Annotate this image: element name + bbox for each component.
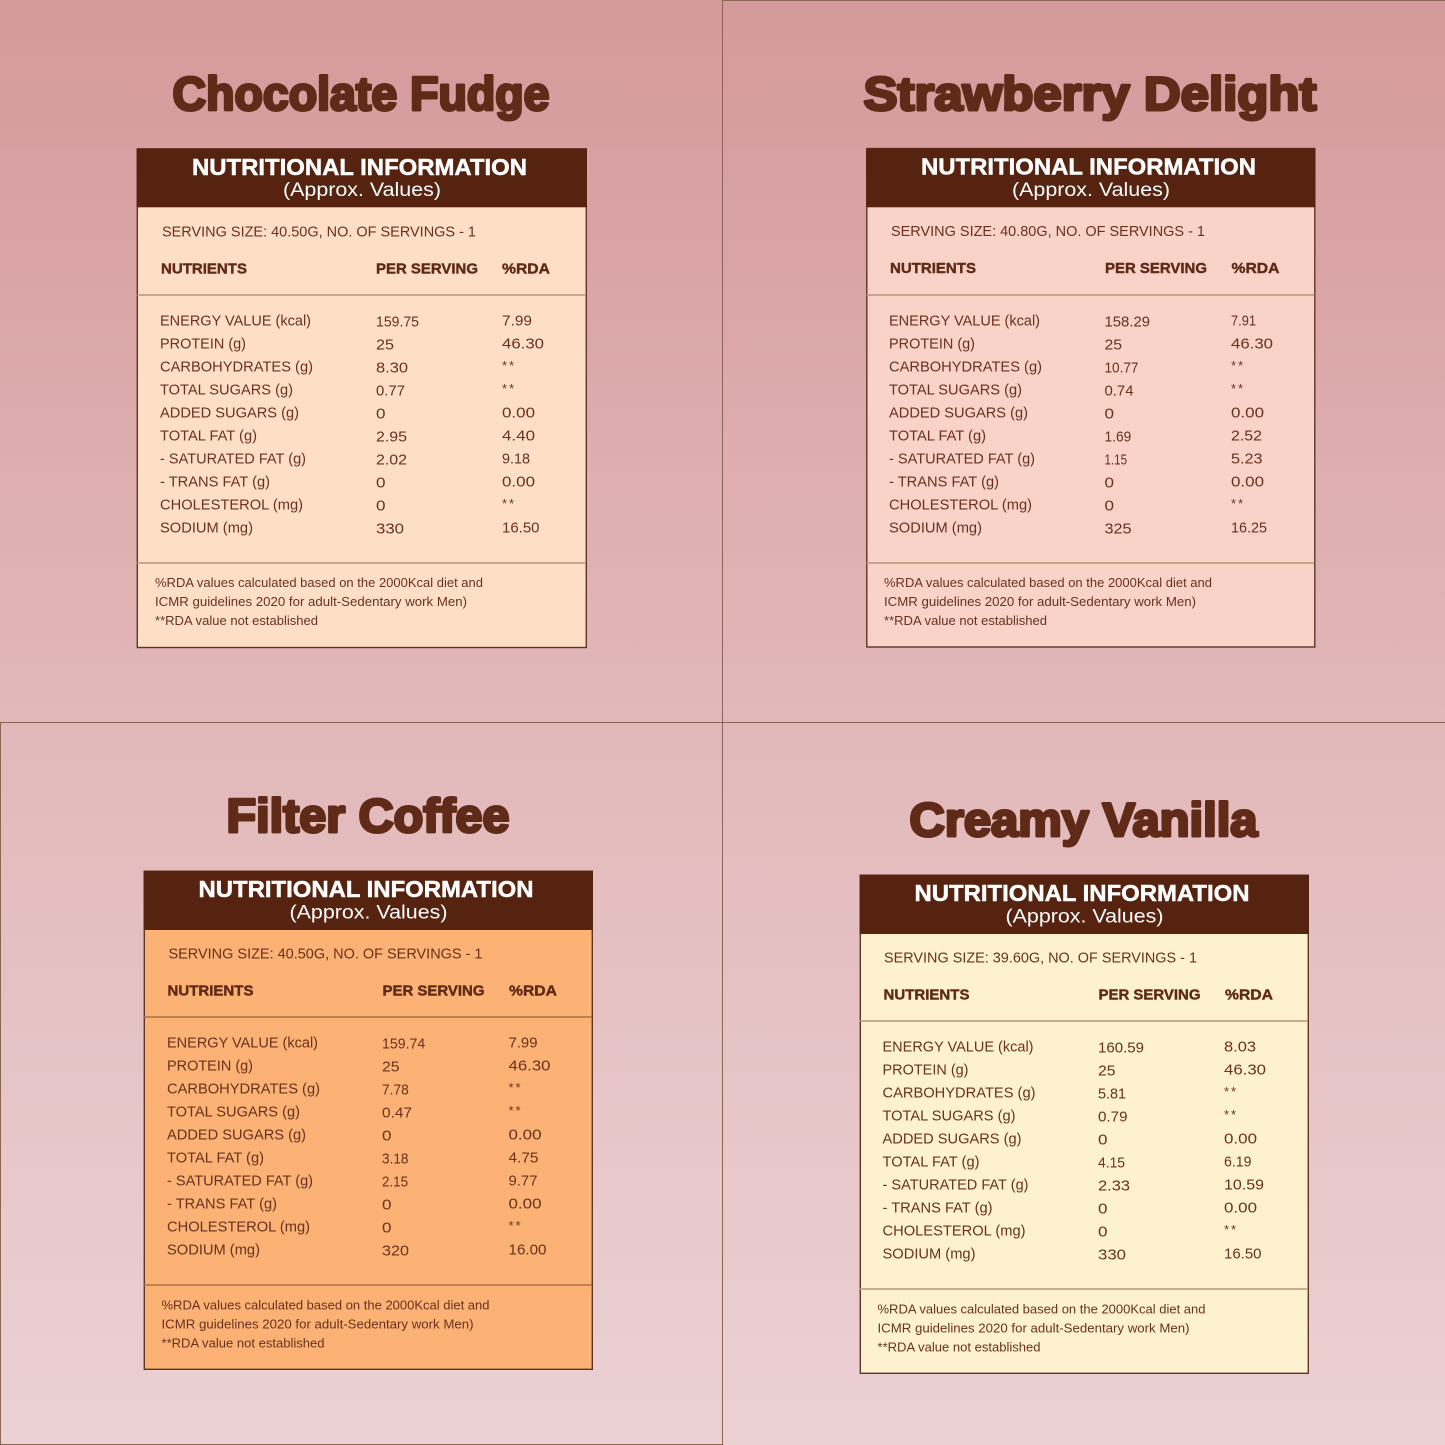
nutrient table: 16.25 (1231, 520, 1267, 536)
column headings: NUTRIENTS (884, 988, 970, 1004)
nutrient table: ADDED SUGARS (g) (889, 406, 1028, 422)
nutrient table: 1.15 (1104, 452, 1127, 468)
nutrient table: PROTEIN (g) (167, 1058, 253, 1074)
footnote (878, 1302, 1206, 1354)
nutrient table: 0.00 (502, 404, 535, 422)
nutrient table: 160.59 (1098, 1040, 1144, 1056)
nutrient table: ** (502, 358, 514, 373)
nutrient table: 46.30 (508, 1058, 550, 1074)
footnote (155, 575, 483, 628)
nutrient table: CARBOHYDRATES (g) (167, 1082, 320, 1098)
header band: NUTRITIONAL INFORMATION (192, 154, 527, 180)
nutrient table: PROTEIN (g) (160, 336, 246, 352)
nutrient table: 0.00 (508, 1196, 542, 1212)
nutrient table: ADDED SUGARS (g) (882, 1132, 1022, 1148)
nutrient table: TOTAL FAT (g) (167, 1150, 264, 1166)
nutrient table: PROTEIN (g) (889, 336, 975, 352)
column headings: PER SERVING (376, 262, 478, 278)
footnote: **RDA value not established (162, 1336, 324, 1350)
footnote: ICMR guidelines 2020 for adult-Sedentary work Men) (162, 1316, 474, 1332)
footnote: %RDA values calculated based on the 2000Kcal diet and (878, 1302, 1206, 1316)
nutrient table: ENERGY VALUE (kcal) (160, 314, 311, 330)
footnote: ICMR guidelines 2020 for adult-Sedentary work Men) (884, 594, 1196, 609)
nutrient table: 0 (1098, 1132, 1108, 1148)
nutrient table: 158.29 (1104, 314, 1150, 330)
header band: (Approx. Values) (1012, 180, 1170, 201)
footnote: **RDA value not established (878, 1340, 1040, 1354)
nutrient table: SODIUM (mg) (889, 520, 982, 536)
nutrient table: 330 (1098, 1246, 1126, 1264)
nutrient table: ENERGY VALUE (kcal) (167, 1036, 318, 1052)
column headings (890, 261, 1280, 277)
column headings: %RDA (1232, 261, 1280, 277)
nutrient table: 16.50 (502, 520, 540, 536)
nutrient table: 9.77 (508, 1172, 538, 1190)
nutrient table: 0.00 (508, 1126, 542, 1144)
nutrient table: 0 (1104, 498, 1114, 514)
serving size: SERVING SIZE: 39.60G, NO. OF SERVINGS - 1 (884, 950, 1197, 966)
footnote (162, 1298, 490, 1350)
nutrient table: 0 (376, 498, 386, 514)
nutrient table: TOTAL SUGARS (g) (882, 1108, 1016, 1124)
column headings: PER SERVING (1098, 988, 1200, 1004)
header band: NUTRITIONAL INFORMATION (914, 880, 1250, 906)
nutrient table: - SATURATED FAT (g) (882, 1178, 1028, 1194)
nutrient table: 0.00 (502, 474, 535, 490)
footnote: ICMR guidelines 2020 for adult-Sedentary work Men) (878, 1320, 1190, 1336)
footnote (884, 575, 1212, 628)
header band: (Approx. Values) (1006, 906, 1164, 928)
nutrient table: - SATURATED FAT (g) (889, 452, 1035, 468)
nutrient table: 0 (1104, 474, 1114, 492)
nutrient table: CARBOHYDRATES (g) (160, 360, 313, 376)
nutrient table: 320 (382, 1242, 409, 1260)
nutrient table: 25 (1104, 336, 1122, 354)
nutrient table: - SATURATED FAT (g) (160, 452, 306, 468)
nutrient table: 46.30 (1224, 1062, 1266, 1078)
nutrient table: SODIUM (mg) (160, 520, 253, 536)
footnote: **RDA value not established (884, 613, 1047, 628)
nutrient table: 2.95 (376, 428, 407, 446)
nutrient table: 46.30 (1231, 336, 1273, 352)
column headings: NUTRIENTS (161, 262, 247, 278)
nutrient table: TOTAL SUGARS (g) (167, 1104, 300, 1120)
nutrient table: 2.52 (1231, 428, 1262, 444)
nutrient table: 2.33 (1098, 1178, 1130, 1194)
title: Filter Coffee: Filter Coffee (226, 790, 510, 843)
column headings: PER SERVING (382, 984, 484, 1000)
column headings (884, 988, 1274, 1004)
column headings: %RDA (509, 984, 558, 1000)
nutrient table: 4.40 (502, 428, 535, 444)
nutrient table: 10.77 (1104, 360, 1138, 376)
footnote: %RDA values calculated based on the 2000Kcal diet and (162, 1298, 490, 1312)
nutrient table: 0.79 (1098, 1108, 1128, 1126)
nutrient table (882, 1038, 1266, 1264)
nutrient table: 7.99 (502, 312, 532, 330)
nutrient table: 16.00 (508, 1242, 546, 1258)
nutrient table: ADDED SUGARS (g) (167, 1128, 306, 1144)
nutrient table: CHOLESTEROL (mg) (882, 1224, 1026, 1240)
nutrient table: 3.18 (382, 1150, 408, 1168)
nutrient table: 7.78 (382, 1082, 409, 1098)
panel: Strawberry Delight nutrition card (866, 148, 1316, 647)
nutrient table: CHOLESTEROL (mg) (160, 498, 303, 514)
serving size: SERVING SIZE: 40.50G, NO. OF SERVINGS - 1 (162, 224, 476, 240)
header band (144, 871, 593, 930)
header band: NUTRITIONAL INFORMATION (921, 154, 1256, 180)
nutrient table: ** (502, 381, 514, 396)
nutrient table: ** (508, 1218, 520, 1233)
panel: Filter Coffee nutrition card (144, 871, 593, 1369)
nutrient table: 0.74 (1104, 382, 1134, 400)
nutrient table: 0.00 (1231, 474, 1264, 490)
header band: NUTRITIONAL INFORMATION (198, 876, 534, 902)
panel: Creamy Vanilla nutrition card (860, 875, 1309, 1373)
panel: Chocolate Fudge nutrition card (137, 148, 587, 648)
nutrient table: 8.03 (1224, 1038, 1256, 1056)
nutrient table: 0 (1098, 1200, 1108, 1218)
nutrient table: ** (1224, 1222, 1236, 1237)
nutrient table: CARBOHYDRATES (g) (889, 360, 1042, 376)
nutrient table: - TRANS FAT (g) (160, 474, 270, 490)
nutrient table: - TRANS FAT (g) (167, 1196, 277, 1212)
header band (860, 875, 1309, 934)
nutrient table (167, 1034, 550, 1260)
nutrient table: TOTAL FAT (g) (160, 428, 257, 444)
nutrient table: ** (1231, 496, 1243, 511)
nutrient table: 6.19 (1224, 1154, 1252, 1170)
nutrient table: TOTAL SUGARS (g) (160, 382, 293, 398)
nutrient table: 8.30 (376, 360, 408, 376)
nutrient table: ** (1224, 1084, 1236, 1099)
nutrient table: 0.00 (1231, 404, 1264, 422)
nutrient table: SODIUM (mg) (167, 1242, 260, 1258)
nutrient table: 9.18 (502, 450, 530, 468)
title: Chocolate Fudge: Chocolate Fudge (172, 68, 550, 121)
nutrient table: 16.50 (1224, 1246, 1262, 1262)
serving size: SERVING SIZE: 40.80G, NO. OF SERVINGS - 1 (891, 224, 1205, 240)
nutrient table: 4.75 (508, 1150, 538, 1166)
nutrient table: 325 (1104, 520, 1132, 538)
nutrient table: 0 (1104, 406, 1114, 422)
nutrient table: 5.81 (1098, 1086, 1126, 1102)
nutrient table: 10.59 (1224, 1176, 1264, 1194)
nutrient table: 25 (382, 1058, 400, 1076)
nutrient table: 7.99 (508, 1034, 538, 1052)
nutrient table: 4.15 (1098, 1154, 1125, 1172)
nutrient table: TOTAL FAT (g) (889, 428, 986, 444)
nutrient table: ENERGY VALUE (kcal) (882, 1040, 1034, 1056)
nutrient table: ENERGY VALUE (kcal) (889, 314, 1040, 330)
nutrient table: 1.69 (1104, 428, 1131, 446)
footnote: ICMR guidelines 2020 for adult-Sedentary work Men) (155, 594, 467, 609)
nutrient table: CHOLESTEROL (mg) (167, 1220, 310, 1236)
nutrient table: TOTAL FAT (g) (882, 1154, 980, 1170)
nutrient table: ** (508, 1080, 520, 1095)
title: Creamy Vanilla: Creamy Vanilla (910, 794, 1258, 847)
header band (137, 148, 587, 207)
footnote: %RDA values calculated based on the 2000Kcal diet and (155, 575, 483, 590)
nutrient table: 25 (376, 336, 394, 354)
nutrient table: TOTAL SUGARS (g) (889, 382, 1022, 398)
nutrient table: 0 (376, 474, 386, 492)
nutrient table: 0.77 (376, 382, 405, 400)
header band (866, 148, 1316, 207)
footnote: **RDA value not established (155, 613, 318, 628)
title: Strawberry Delight: Strawberry Delight (864, 68, 1317, 121)
nutrient table: CHOLESTEROL (mg) (889, 498, 1032, 514)
nutrient table: 2.02 (376, 452, 407, 468)
nutrient table: 25 (1098, 1062, 1116, 1080)
column headings: NUTRIENTS (168, 984, 254, 1000)
nutrient table: 2.15 (382, 1174, 408, 1190)
nutrient table: CARBOHYDRATES (g) (882, 1086, 1036, 1102)
nutrient table: 0 (1098, 1224, 1108, 1240)
nutrient table: - SATURATED FAT (g) (167, 1174, 313, 1190)
footnote: %RDA values calculated based on the 2000Kcal diet and (884, 575, 1212, 590)
nutrient table: ** (1231, 381, 1243, 396)
column headings: %RDA (502, 262, 551, 278)
nutrient table (160, 312, 544, 538)
nutrient table: 5.23 (1231, 450, 1262, 468)
nutrient table: 159.75 (376, 314, 419, 330)
nutrient table: - TRANS FAT (g) (882, 1200, 992, 1216)
nutrient table: ** (1224, 1107, 1236, 1122)
nutrient table: 0.47 (382, 1104, 412, 1122)
nutrient table: 0 (376, 406, 386, 422)
nutrient table: ** (508, 1103, 520, 1118)
header band: (Approx. Values) (283, 180, 441, 201)
nutrient table: ** (502, 496, 514, 511)
nutrient table: 0 (382, 1128, 392, 1144)
nutrient table: SODIUM (mg) (882, 1246, 976, 1262)
nutrient table: 330 (376, 520, 404, 538)
nutrient table: 7.91 (1231, 312, 1256, 330)
nutrient table: 46.30 (502, 336, 544, 352)
nutrient table (889, 312, 1273, 538)
nutrient table: 0.00 (1224, 1130, 1257, 1148)
serving size: SERVING SIZE: 40.50G, NO. OF SERVINGS - 1 (168, 946, 482, 962)
column headings (161, 262, 551, 278)
nutrient table: 0 (382, 1196, 392, 1214)
nutrient table: ADDED SUGARS (g) (160, 406, 299, 422)
column headings: NUTRIENTS (890, 261, 976, 277)
column headings (168, 984, 558, 1000)
nutrient table: 0 (382, 1220, 392, 1236)
header band: (Approx. Values) (290, 902, 448, 924)
column headings: %RDA (1225, 988, 1274, 1004)
column headings: PER SERVING (1105, 261, 1207, 277)
nutrient table: 159.74 (382, 1036, 425, 1052)
nutrient table: - TRANS FAT (g) (889, 474, 999, 490)
nutrient table: 0.00 (1224, 1200, 1257, 1216)
nutrient table: PROTEIN (g) (882, 1062, 968, 1078)
nutrient table: ** (1231, 358, 1243, 373)
